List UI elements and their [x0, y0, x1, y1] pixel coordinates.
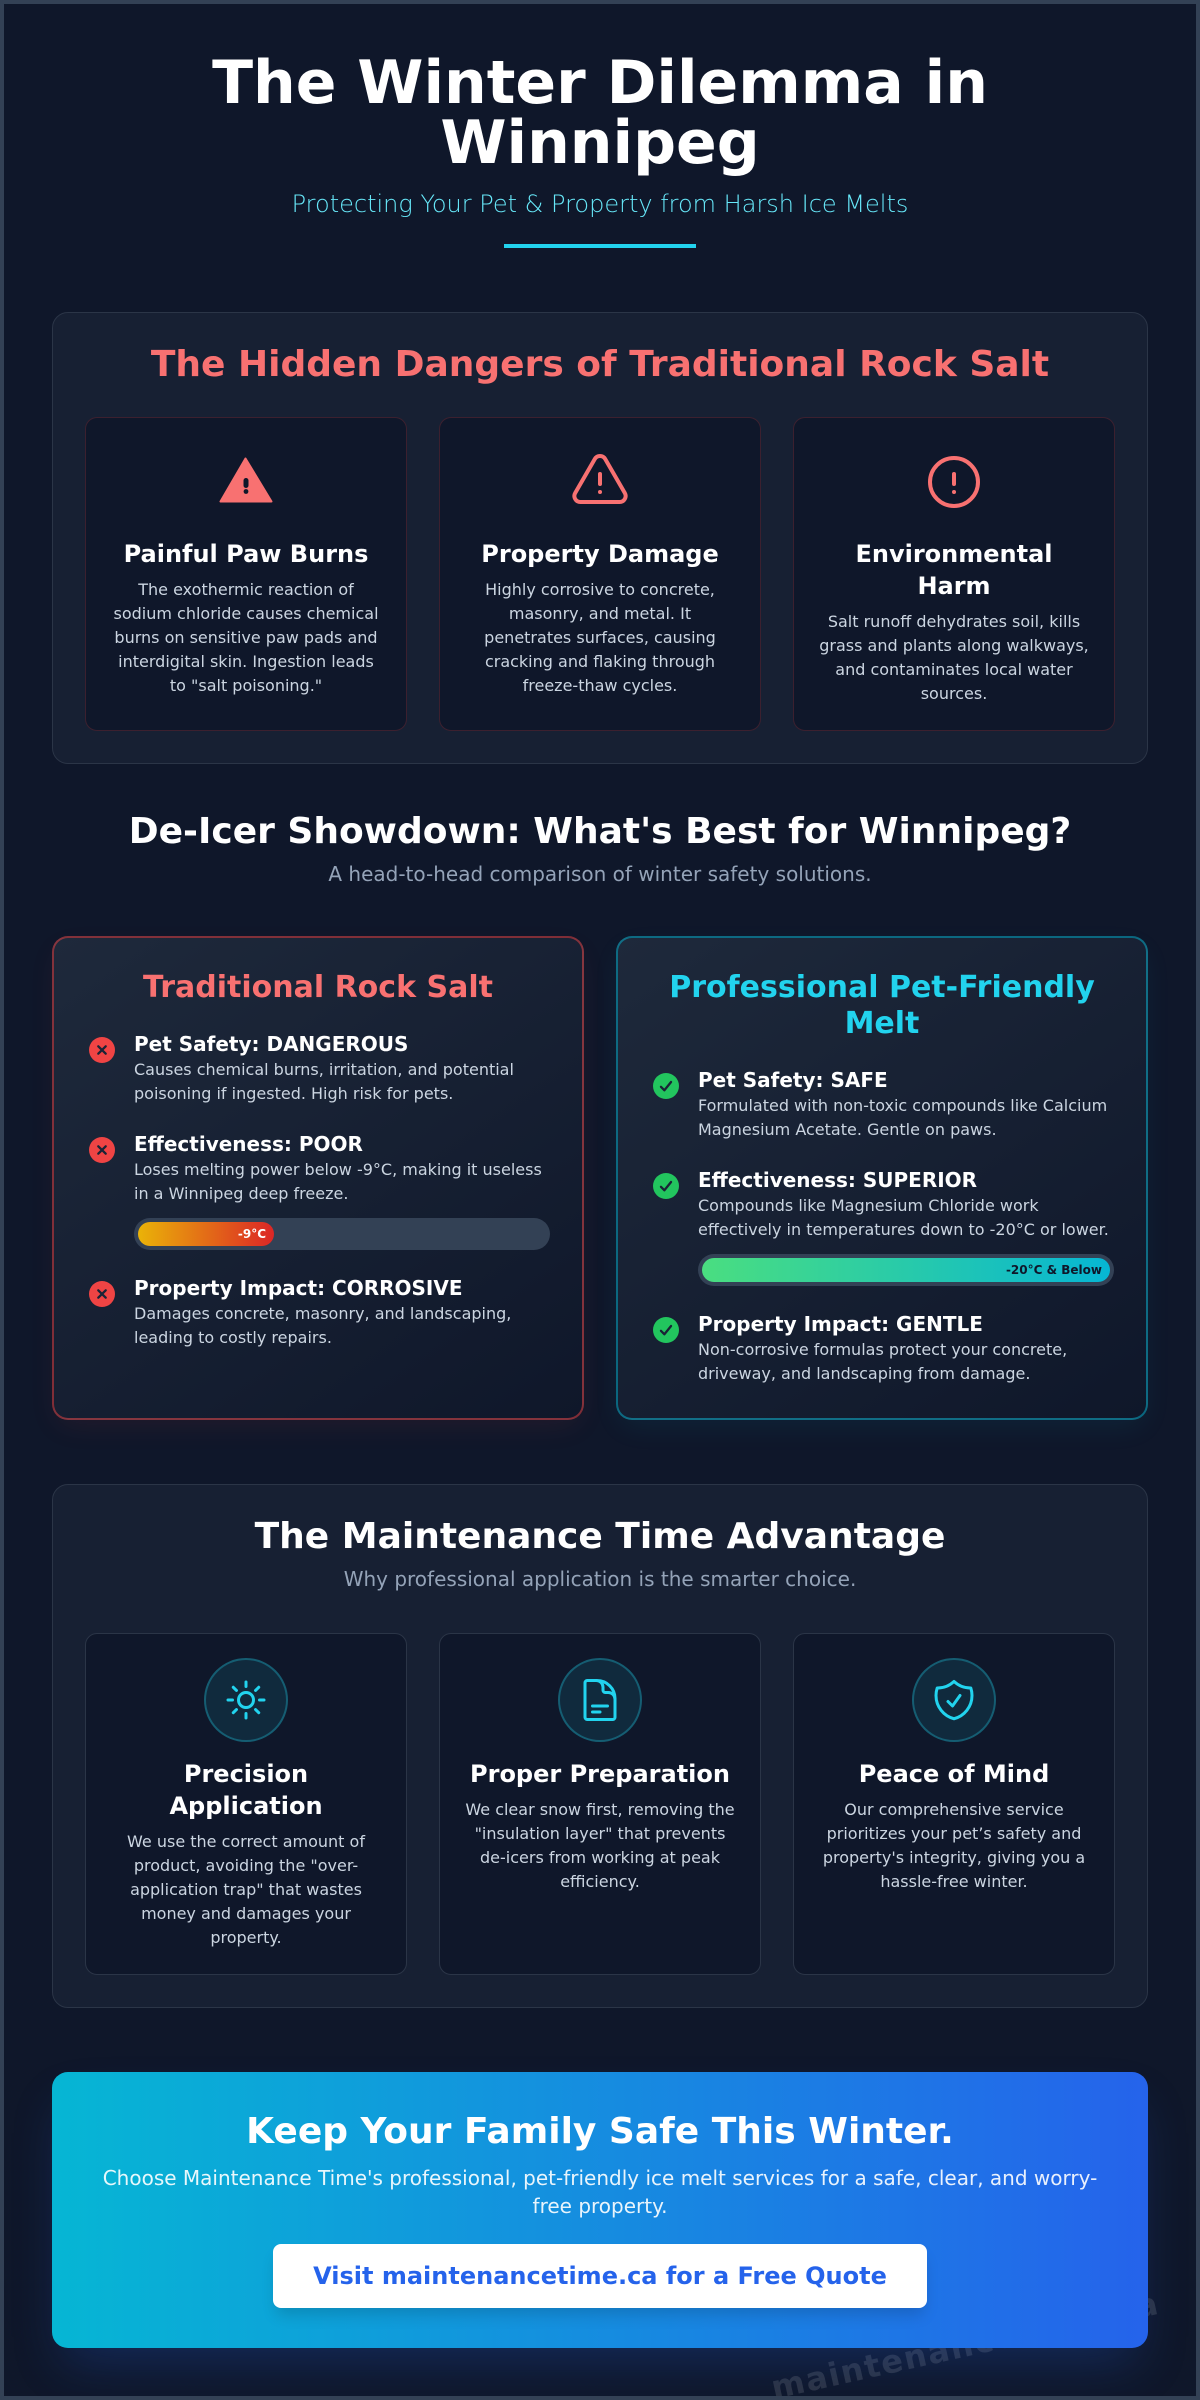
- card text: money and damages your: [141, 1904, 351, 1923]
- title: [212, 48, 988, 178]
- heading: De-Icer Showdown: What's Best for Winnipeg?: [129, 811, 1071, 852]
- danger cards: [85, 417, 1115, 731]
- column heading: Melt: [845, 1006, 919, 1041]
- icon: outlined warning triangle: [572, 454, 628, 504]
- item: pet safety safe: Pet Safety: SAFE: [698, 1068, 888, 1092]
- panel: maintenance time advantage: [52, 1484, 1148, 2008]
- card title: Precision: [184, 1760, 308, 1788]
- item: effectiveness poor: in a Winnipeg deep freeze.: [134, 1184, 348, 1203]
- card text: prioritizes your pet’s safety and: [827, 1824, 1081, 1843]
- cta button: Visit maintenancetime.ca for a Free Quote: [313, 2262, 887, 2290]
- card text: [465, 1800, 735, 1891]
- item: property impact gentle: [653, 1312, 1067, 1383]
- item: pet safety safe: Formulated with non-toxic compounds like Calcium: [698, 1096, 1107, 1115]
- card text: Our comprehensive service: [844, 1800, 1064, 1819]
- card title: Harm: [917, 572, 991, 600]
- cta text: Choose Maintenance Time's professional, pet-friendly ice melt services for a safe, clear, and worry-: [103, 2166, 1097, 2190]
- card title: Proper Preparation: [470, 1760, 730, 1788]
- panel: traditional rock salt: [52, 936, 584, 1420]
- card text: freeze-thaw cycles.: [523, 676, 677, 695]
- card text: The exothermic reaction of: [138, 580, 354, 599]
- comparison: [52, 936, 1148, 1427]
- temperature bar: -20C and below: -20°C & Below: [1006, 1263, 1102, 1277]
- item: property impact corrosive: leading to costly repairs.: [134, 1328, 332, 1347]
- card title: [855, 540, 1053, 600]
- icon: document: [558, 1658, 642, 1742]
- card text: cracking and flaking through: [485, 652, 715, 671]
- card title: Environmental: [855, 540, 1053, 568]
- icon: sun: [204, 1658, 288, 1742]
- card: precision application: [85, 1633, 407, 1975]
- card: proper preparation: [439, 1633, 761, 1975]
- card text: de-icers from working at peak: [480, 1848, 720, 1867]
- card title: Application: [169, 1792, 323, 1820]
- item: pet safety dangerous: [89, 1032, 514, 1103]
- card text: interdigital skin. Ingestion leads: [118, 652, 374, 671]
- accent bar: [504, 244, 696, 248]
- panel: hidden dangers of rock salt: [52, 312, 1148, 764]
- section heading: showdown: [129, 811, 1071, 886]
- card text: efficiency.: [560, 1872, 640, 1891]
- item: pet safety safe: [653, 1068, 1107, 1139]
- item: effectiveness superior: effectively in temperatures down to -20°C or lower.: [698, 1220, 1109, 1239]
- card text: masonry, and metal. It: [509, 604, 691, 623]
- cta button: [273, 2244, 927, 2308]
- card text: grass and plants along walkways,: [819, 636, 1089, 655]
- card: painful paw burns: [85, 417, 407, 731]
- card: peace of mind: [793, 1633, 1115, 1975]
- column heading: Traditional Rock Salt: [143, 970, 493, 1005]
- item: pet safety safe: Magnesium Acetate. Gentle on paws.: [698, 1120, 997, 1139]
- icon: exclamation circle: [928, 456, 980, 508]
- item: property impact gentle: Property Impact: GENTLE: [698, 1312, 983, 1336]
- card text: application trap" that wastes: [130, 1880, 362, 1899]
- card text: [484, 580, 716, 695]
- card text: property.: [210, 1928, 282, 1947]
- temperature bar: -20C and below: [698, 1254, 1114, 1286]
- item: effectiveness superior: [653, 1168, 1114, 1286]
- card text: sources.: [921, 684, 987, 703]
- card title: Peace of Mind: [859, 1760, 1049, 1788]
- card title: Painful Paw Burns: [124, 540, 368, 568]
- card text: [113, 580, 379, 695]
- item: property impact corrosive: Damages concrete, masonry, and landscaping,: [134, 1304, 511, 1323]
- header: [212, 48, 988, 248]
- card text: to "salt poisoning.": [170, 676, 322, 695]
- card title: Property Damage: [481, 540, 719, 568]
- card: property damage: [439, 417, 761, 731]
- item: effectiveness poor: [89, 1132, 550, 1250]
- card text: Highly corrosive to concrete,: [485, 580, 715, 599]
- card text: penetrates surfaces, causing: [484, 628, 716, 647]
- card text: Salt runoff dehydrates soil, kills: [828, 612, 1080, 631]
- card text: sodium chloride causes chemical: [113, 604, 379, 623]
- item: effectiveness poor: Loses melting power below -9°C, making it useless: [134, 1160, 542, 1179]
- subheading: A head-to-head comparison of winter safety solutions.: [328, 862, 872, 886]
- icon: shield check: [912, 1658, 996, 1742]
- card title: [169, 1760, 323, 1820]
- card text: and contaminates local water: [835, 660, 1073, 679]
- item: pet safety dangerous: Pet Safety: DANGEROUS: [134, 1032, 408, 1056]
- card text: [823, 1800, 1085, 1891]
- heading: hidden dangers: The Hidden Dangers of Traditional Rock Salt: [151, 344, 1049, 385]
- item: effectiveness superior: Effectiveness: SUPERIOR: [698, 1168, 977, 1192]
- item: pet safety dangerous: Causes chemical burns, irritation, and potential: [134, 1060, 514, 1079]
- advantage cards: [85, 1633, 1115, 1975]
- card text: We use the correct amount of: [127, 1832, 365, 1851]
- icon: filled warning triangle: [220, 458, 272, 502]
- temperature bar: -9C: [134, 1218, 550, 1250]
- card: environmental harm: [793, 417, 1115, 731]
- card text: [819, 612, 1089, 703]
- cta heading: Keep Your Family Safe This Winter.: [246, 2111, 954, 2152]
- column heading: [669, 970, 1095, 1041]
- temperature bar: -9C: -9°C: [238, 1227, 266, 1241]
- column heading: Professional Pet-Friendly: [669, 970, 1095, 1005]
- cta text: free property.: [533, 2194, 667, 2218]
- item: effectiveness poor: Effectiveness: POOR: [134, 1132, 363, 1156]
- card text: hassle-free winter.: [880, 1872, 1028, 1891]
- heading: The Maintenance Time Advantage: [255, 1516, 945, 1557]
- item: property impact gentle: driveway, and landscaping from damage.: [698, 1364, 1030, 1383]
- item: pet safety dangerous: poisoning if ingested. High risk for pets.: [134, 1084, 453, 1103]
- card text: [127, 1832, 366, 1947]
- panel: professional pet-friendly melt: [616, 936, 1148, 1420]
- card text: product, avoiding the "over-: [134, 1856, 358, 1875]
- card text: "insulation layer" that prevents: [475, 1824, 725, 1843]
- cta text: [103, 2166, 1097, 2218]
- title: Winnipeg: [440, 108, 760, 178]
- call to action: [52, 2072, 1148, 2348]
- card text: burns on sensitive paw pads and: [114, 628, 378, 647]
- card text: We clear snow first, removing the: [465, 1800, 735, 1819]
- title: The Winter Dilemma in: [212, 48, 988, 118]
- item: property impact corrosive: [89, 1276, 511, 1347]
- card text: property's integrity, giving you a: [823, 1848, 1085, 1867]
- subheading: Why professional application is the smarter choice.: [344, 1567, 856, 1591]
- item: effectiveness superior: Compounds like Magnesium Chloride work: [698, 1196, 1039, 1215]
- item: property impact gentle: Non-corrosive formulas protect your concrete,: [698, 1340, 1067, 1359]
- item: property impact corrosive: Property Impact: CORROSIVE: [134, 1276, 463, 1300]
- subtitle: Protecting Your Pet & Property from Harsh Ice Melts: [292, 190, 908, 218]
